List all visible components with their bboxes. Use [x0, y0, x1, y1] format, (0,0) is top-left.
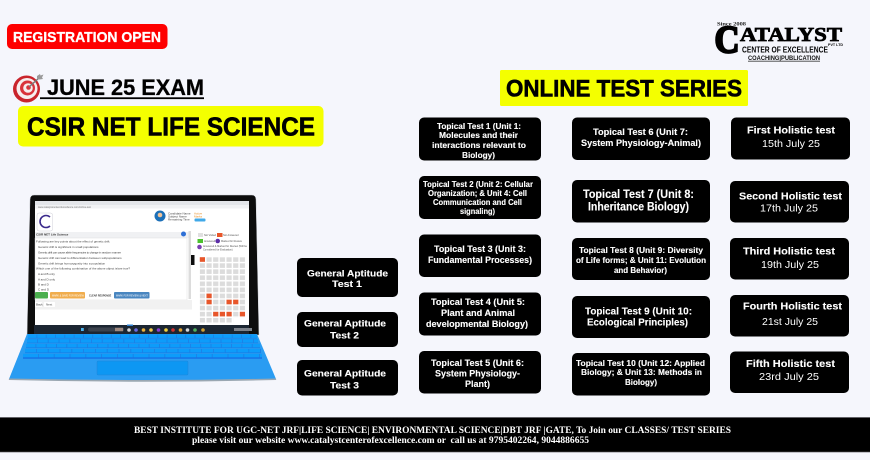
card: topical test 2: Communication and Cell — [433, 198, 522, 207]
logo: Catalyst Center of Excellence: Since 2008 — [717, 22, 746, 28]
card: topical test 9: Ecological Principles) — [587, 318, 688, 328]
exam screen: CLEAR RESPONSE — [89, 294, 112, 298]
panel: holistic tests — [730, 118, 850, 393]
card: fifth holistic test: 23rd July 25 — [759, 371, 819, 383]
footer banner: please visit our website www.catalystcenterofexcellence.com or call us at 9795402264, 9044886655 — [192, 436, 589, 446]
card: general aptitude test 3: General Aptitude — [304, 368, 386, 380]
card: topical test 4: Topical Test 4 (Unit 5: — [431, 297, 525, 307]
exam screen: Remaining Time — [168, 218, 190, 222]
card: topical test 6: System Physiology-Animal) — [581, 138, 701, 149]
exam screen: A and D only — [38, 278, 56, 282]
exam screen: Genetic drift brings homozygosity into a population — [38, 262, 106, 266]
card: topical test 5: Topical Test 5 (Unit 6: — [431, 358, 524, 368]
card: general aptitude test 3: Test 3 — [330, 380, 359, 392]
exam screen: Answered — [204, 240, 216, 243]
card: second holistic test: Second Holistic test — [739, 190, 843, 202]
footer banner: BEST INSTITUTE FOR UGC-NET JRF|LIFE SCIENCE| ENVIRONMENTAL SCIENCE|DBT JRF |GATE, To Join our CLASSES/ TEST SERIES — [134, 426, 731, 436]
exam screen: Subject Name — [168, 214, 187, 218]
card: topical test 10: Topical Test 10 (Unit 12: Applied — [576, 358, 705, 368]
card: topical test 1: interactions relevant to — [432, 140, 526, 150]
card: topical test 2 — [419, 176, 541, 219]
logo: Catalyst Center of Excellence: CENTER OF EXCELLENCE — [742, 44, 828, 54]
card: topical test 10 — [572, 353, 710, 396]
card: topical test 3: Topical Test 3 (Unit 3: — [434, 244, 526, 254]
exam screen: Not Visited — [204, 234, 217, 237]
title: CSIR NET Life Science — [18, 106, 324, 146]
exam screen: MARK & SAVE FOR REVIEW — [52, 294, 85, 298]
exam screen: Not Answered — [223, 234, 239, 237]
card: topical test 10: Biology) — [625, 377, 657, 387]
footer banner — [0, 417, 870, 452]
card: topical test 2: Topical Test 2 (Unit 2: Cellular — [423, 180, 533, 189]
card: general aptitude test 3 — [297, 360, 398, 396]
card: topical test 1: Biology) — [462, 150, 495, 160]
exam screen: CSIR NET Life Science — [36, 232, 69, 236]
card: topical test 4: Plant and Animal — [441, 308, 515, 318]
logo: Catalyst Center of Excellence — [714, 19, 843, 62]
card: topical test 6: Topical Test 6 (Unit 7: — [593, 127, 688, 138]
badge: registration open: REGISTRATION OPEN — [13, 30, 161, 46]
exam screen: Marks — [194, 214, 203, 218]
badge: registration open — [7, 24, 168, 49]
card: fourth holistic test — [730, 295, 849, 336]
exam screen: Active — [194, 212, 203, 216]
logo: Catalyst Center of Excellence: PVT LTD — [828, 43, 843, 47]
card: fourth holistic test: Fourth Holistic test — [743, 301, 843, 313]
card: topical test 10: Biology; & Unit 13: Methods in — [581, 367, 702, 377]
card: general aptitude test 1: General Aptitude — [307, 268, 388, 280]
card: general aptitude test 1 — [297, 258, 398, 297]
taskbar — [34, 324, 252, 334]
trackpad — [97, 361, 188, 375]
title: CSIR NET Life Science: CSIR NET LIFE SCIENCE — [27, 114, 315, 142]
laptop illustration — [9, 195, 276, 382]
logo: Catalyst Center of Excellence: COACHING|PUBLICATION — [748, 55, 820, 62]
card: topical test 5: Plant) — [465, 379, 490, 389]
panel: topical tests 6 to 10 — [572, 118, 710, 396]
card: first holistic test: 15th July 25 — [762, 138, 820, 150]
laptop screen bezel — [27, 195, 259, 335]
exam screen: Considered for Evaluation) — [203, 248, 233, 252]
card: topical test 2: signaling) — [460, 207, 495, 216]
card: first holistic test: First Holistic test — [747, 124, 836, 136]
card: topical test 8: and Behavior) — [614, 265, 667, 275]
card: general aptitude test 2: General Aptitude — [304, 318, 386, 330]
card: topical test 5: System Physiology- — [435, 368, 520, 378]
card: topical test 7: Inheritance Biology) — [588, 202, 689, 214]
card: topical test 4: developmental Biology) — [426, 319, 528, 329]
exam screen: Marked for Review — [221, 240, 242, 243]
card: topical test 7 — [572, 180, 710, 222]
panel: general aptitude tests — [297, 258, 398, 396]
card: topical test 3: Fundamental Processes) — [428, 255, 532, 265]
card: general aptitude test 2 — [297, 312, 398, 347]
card: fifth holistic test — [730, 352, 849, 393]
card: topical test 9 — [572, 296, 710, 338]
card: third holistic test — [730, 238, 849, 280]
card: general aptitude test 2: Test 2 — [330, 330, 359, 342]
exam screen: www.catalystcenterofexcellence.com/online-test — [38, 206, 91, 209]
question palette — [200, 257, 247, 324]
card: topical test 2: Organization; & Unit 4: Cell — [428, 189, 527, 198]
card: third holistic test: Third Holistic test — [743, 246, 836, 258]
card: topical test 5 — [419, 351, 541, 394]
exam screen: MARK FOR REVIEW & NEXT — [116, 294, 149, 298]
card: second holistic test — [730, 181, 849, 222]
logo: Catalyst Center of Excellence: C — [714, 19, 740, 62]
exam screen: Genetic drift is significant in small populations — [38, 245, 99, 249]
card: topical test 8: of Life forms; & Unit 11: Evolution — [576, 255, 706, 265]
card: second holistic test: 17th July 25 — [760, 203, 818, 215]
card: topical test 7: Topical Test 7 (Unit 8: — [583, 189, 694, 201]
exam screen: A and B only — [38, 272, 55, 276]
card: topical test 9: Topical Test 9 (Unit 10: — [585, 306, 692, 318]
keyboard base — [9, 334, 276, 382]
exam screen: Next — [46, 302, 52, 306]
exam screen — [35, 201, 249, 325]
card: topical test 1: Molecules and their — [439, 130, 519, 140]
exam screen: Which one of the following combination of the above object is/are true? — [36, 266, 130, 270]
card: third holistic test: 19th July 25 — [761, 259, 819, 271]
exam screen: Back — [36, 302, 43, 306]
exam screen: Candidate Name — [168, 212, 191, 216]
exam screen: Genetic drift can cause allele frequencies to change in random manner — [38, 250, 121, 254]
card: fourth holistic test: 21st July 25 — [762, 316, 818, 328]
card: first holistic test — [731, 118, 850, 160]
heading: online test series: ONLINE TEST SERIES — [506, 76, 742, 103]
panel: topical tests 1 to 5 — [419, 118, 541, 394]
exam screen: Answered & Marked for Review (Will be — [203, 245, 248, 248]
exam screen: Following are key points about the effect of genetic drift: — [36, 240, 110, 244]
card: topical test 8: Topical Test 8 (Unit 9: Diversity — [579, 245, 703, 255]
exam screen: B and D — [38, 282, 50, 286]
card: topical test 1 — [419, 118, 541, 160]
card: fifth holistic test: Fifth Holistic test — [746, 358, 836, 370]
card: topical test 1: Topical Test 1 (Unit 1: — [437, 121, 521, 131]
exam screen: C and D — [38, 288, 50, 292]
card: topical test 3 — [419, 234, 541, 277]
exam screen: Genetic drift can lead to differentiation between subpopulations — [38, 256, 122, 260]
card: topical test 4 — [419, 292, 541, 336]
card: topical test 6 — [572, 118, 710, 160]
heading: June 25 exam: JUNE 25 EXAM — [47, 75, 204, 100]
logo: Catalyst Center of Excellence: ATALYST — [740, 25, 842, 46]
icon: target with arrow — [13, 74, 44, 102]
card: general aptitude test 1: Test 1 — [332, 279, 363, 290]
card: topical test 8 — [572, 238, 710, 280]
